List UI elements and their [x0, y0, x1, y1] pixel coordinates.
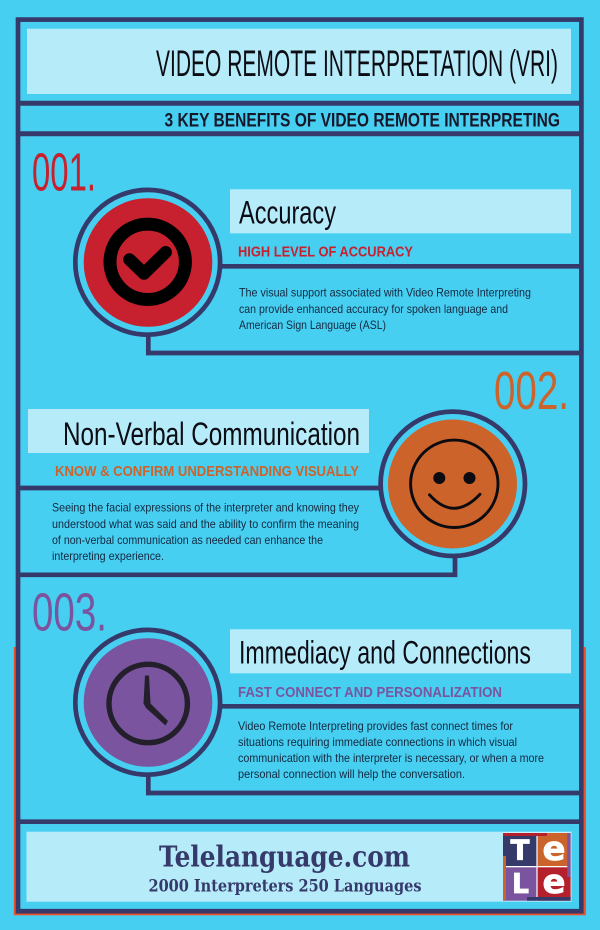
- number 002: 002.: [494, 361, 569, 421]
- body text: American Sign Language (ASL): [239, 318, 386, 332]
- heading box: Accuracy: Accuracy: [239, 194, 336, 230]
- website name: Telelanguage.com: [159, 840, 410, 874]
- subheading: FAST CONNECT AND PERSONALIZATION: [238, 685, 502, 701]
- body text: [52, 501, 359, 563]
- icon: smiley in orange circle: [381, 412, 525, 556]
- number 003: 003.: [32, 582, 107, 642]
- logo: TeLe: e: [542, 829, 566, 868]
- body text: personal connection will help the conversation.: [238, 767, 465, 781]
- logo: TeLe: L: [512, 867, 529, 900]
- heading box: Accuracy: [230, 189, 571, 233]
- subheading: KNOW & CONFIRM UNDERSTANDING VISUALLY: [55, 464, 359, 480]
- panel: title banner: [27, 29, 571, 94]
- body text: [239, 286, 531, 332]
- logo: TeLe: T: [510, 834, 530, 866]
- body text: The visual support associated with Video Remote Interpreting: [239, 286, 531, 300]
- icon: clock in purple circle: [75, 630, 220, 775]
- tagline: 2000 Interpreters 250 Languages: [148, 877, 422, 896]
- body text: Seeing the facial expressions of the interpreter and knowing they: [52, 501, 359, 515]
- heading box: Non-Verbal Communication: Non-Verbal Communication: [63, 416, 360, 452]
- body text: of non-verbal communication as needed can enhance the: [52, 533, 323, 547]
- logo: TeLe: [503, 829, 571, 901]
- panel: 002 non-verbal communication: [20, 361, 569, 575]
- panel: 003 immediacy and connections: [32, 582, 580, 793]
- body text: communication with the interpreter is necessary, or when a more: [238, 751, 544, 765]
- icon: checkmark in red circle: [75, 190, 220, 335]
- subheading: HIGH LEVEL OF ACCURACY: [238, 245, 413, 261]
- body text: Video Remote Interpreting provides fast connect times for: [238, 719, 513, 733]
- number 001: 001.: [32, 142, 96, 202]
- body text: interpreting experience.: [52, 549, 164, 563]
- body text: can provide enhanced accuracy for spoken language and: [239, 302, 508, 316]
- body text: understood what was said and the ability to confirm the meaning: [52, 517, 359, 531]
- body text: situations requiring immediate connections in which visual: [238, 735, 517, 749]
- panel: footer: [26, 829, 572, 902]
- heading box: Non-Verbal Communication: [28, 409, 369, 453]
- logo: TeLe: e: [542, 862, 566, 901]
- panel: 001 accuracy: [32, 142, 580, 353]
- body text: [238, 719, 544, 781]
